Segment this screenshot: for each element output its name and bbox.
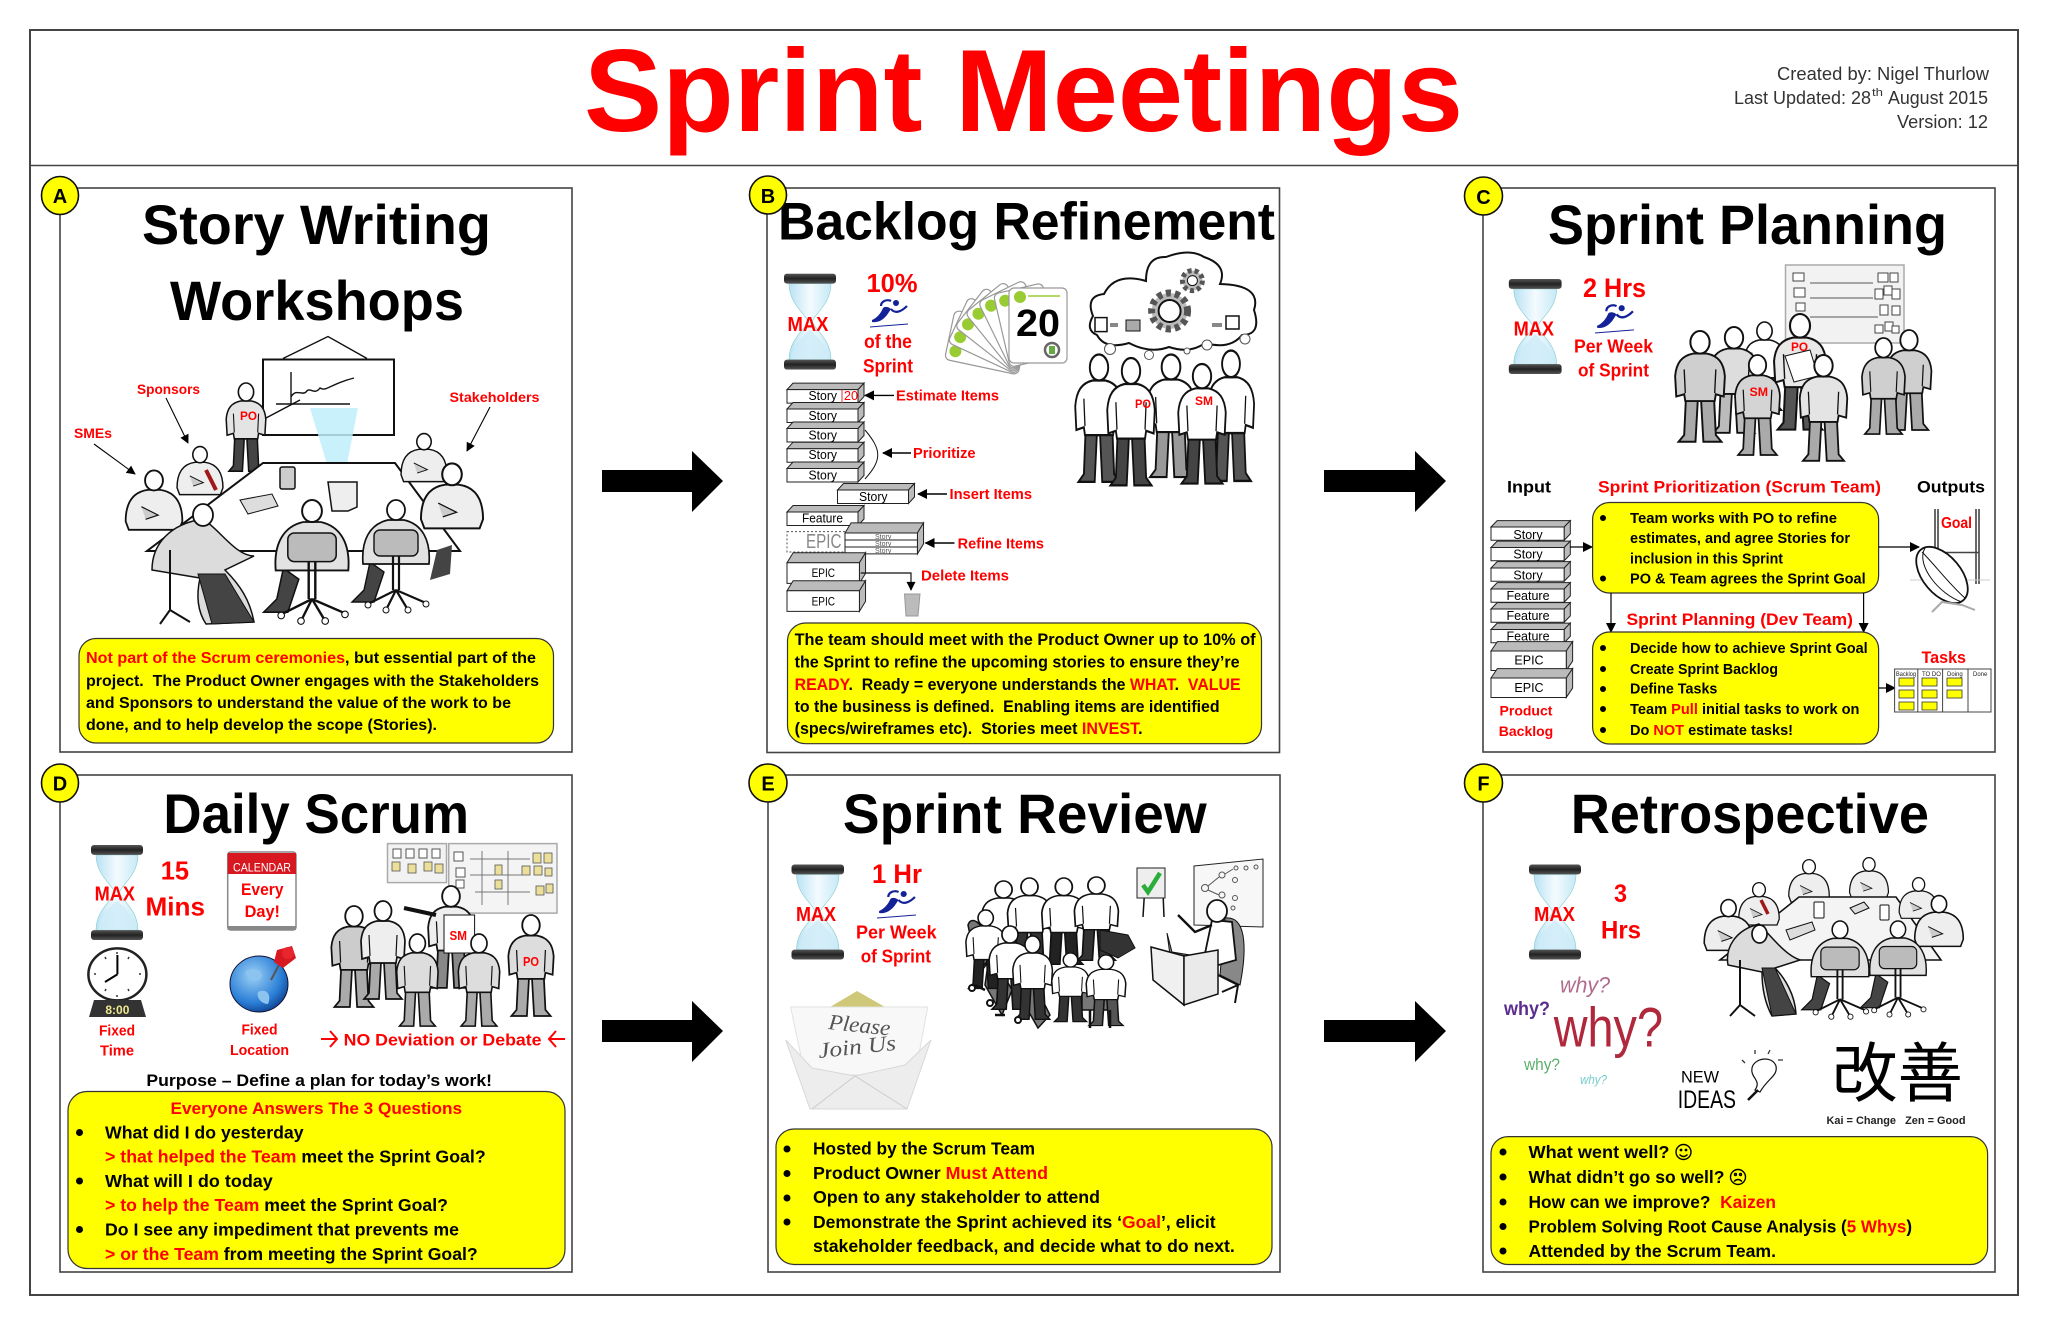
icon: planning poker cards: [945, 280, 1067, 375]
document credits: Created by: Nigel Thurlow: [1777, 64, 1990, 84]
backlog stack: EPIC: [812, 566, 835, 580]
text: purpose: Purpose – Define a plan for today’s work!: [146, 1071, 492, 1090]
label: Delete Items: Delete Items: [921, 569, 1009, 585]
label: Sponsors: Sponsors: [137, 381, 200, 397]
backlog stack: Story: [875, 541, 892, 548]
backlog stack: Story: [875, 534, 892, 541]
icon: calendar: Every: [241, 880, 284, 899]
arrow: A to B: [602, 451, 723, 512]
callout: the 3 questions: > or the Team from meeting the Sprint Goal?: [105, 1244, 478, 1264]
backlog stack: 20: [844, 389, 858, 403]
word cloud: why: why?: [1560, 972, 1611, 997]
label: SMEs: [74, 425, 135, 474]
time box: 2 Hrs per week of Sprint: Per Week: [1574, 337, 1654, 357]
label: Sponsors: [137, 381, 200, 443]
backlog stack: Feature: [802, 512, 843, 526]
badge F: [1464, 764, 1502, 802]
callout: Attended by the Scrum Team.: [1528, 1241, 1776, 1261]
arrow: to goal: [1878, 546, 1919, 548]
callout: Sprint Prioritization: PO & Team agrees the Sprint Goal: [1630, 572, 1866, 588]
label: Goal: Goal: [1941, 515, 1972, 532]
callout: done, and to help develop the scope (Stories).: [86, 717, 437, 734]
document credits: [1734, 64, 1990, 132]
badge C: C: [1476, 187, 1491, 209]
product backlog stack: Feature: [1506, 630, 1550, 644]
label: PO: PO: [1135, 397, 1151, 411]
product backlog stack: Story: [1513, 528, 1543, 542]
panel A: Story Writing Workshops: [42, 176, 572, 752]
product backlog stack: Story: [1513, 569, 1543, 583]
callout: [776, 1129, 1272, 1264]
badge E: [749, 764, 787, 802]
label: PO: PO: [240, 411, 257, 423]
callout: Sprint Planning: Create Sprint Backlog: [1630, 662, 1778, 678]
illustration: new ideas: IDEAS: [1678, 1086, 1736, 1114]
callout: [1491, 1137, 1988, 1264]
label: PO: PO: [1791, 340, 1808, 354]
icon: invitation envelope: [786, 991, 931, 1109]
word cloud: why: [1503, 972, 1663, 1087]
panel B: Backlog Refinement: [750, 176, 1280, 752]
label: Fixed Location: Fixed: [242, 1022, 278, 1039]
backlog stack: Story: [808, 468, 838, 482]
product backlog stack: Feature: [1506, 609, 1550, 623]
arrow: B to C: [1324, 451, 1446, 512]
label: Stakeholders: Stakeholders: [450, 389, 540, 405]
heading: Story Writing: [142, 193, 491, 256]
word cloud: why: why?: [1503, 999, 1550, 1020]
callout: to the business is defined. Enabling items are identified: [795, 698, 1220, 716]
document credits: August 2015: [1888, 88, 1988, 108]
arrow: right down: [1863, 593, 1865, 632]
label: Product Backlog: Backlog: [1499, 723, 1553, 739]
label: Kai = Change, Zen = Good: Kai = Change Zen = Good: [1826, 1115, 1966, 1127]
backlog stack: Story: [808, 389, 838, 403]
backlog stack: [787, 383, 924, 616]
badge A: A: [53, 186, 67, 208]
time box: 15 Mins: 15: [161, 856, 189, 886]
illustration: audience and presenter: [966, 859, 1263, 1028]
illustration: new ideas: [1678, 1050, 1786, 1114]
callout: What went well?: [1528, 1142, 1670, 1162]
callout: Not part of the Scrum ceremonies, but essential part of the: [86, 650, 536, 667]
label: Prioritize: Prioritize: [913, 446, 976, 462]
word cloud: why: why?: [1553, 996, 1663, 1058]
time box: 3 Hrs: 3: [1614, 880, 1627, 908]
callout: the Sprint to refine the upcoming stories to ensure they’re: [795, 653, 1240, 671]
callout: Sprint Planning: Team Pull initial tasks to work on: [1630, 702, 1860, 718]
icon: calendar: [228, 852, 296, 930]
icon: invitation envelope: Please: [826, 1009, 892, 1040]
time box: 10% of the Sprint: Sprint: [863, 356, 914, 378]
icon: invitation envelope: Join Us: [817, 1030, 897, 1063]
badge B: [750, 176, 786, 214]
callout: Sprint Prioritization: inclusion in this Sprint: [1630, 551, 1783, 567]
callout: Hosted by the Scrum Team: [813, 1139, 1035, 1159]
icon: clock: 8:00: [105, 1003, 130, 1017]
time box: 2 Hrs per week of Sprint: of Sprint: [1578, 361, 1649, 381]
label: Fixed Time: [99, 1023, 135, 1060]
document credits: Version: 12: [1897, 112, 1988, 132]
label: Fixed Location: Location: [230, 1042, 289, 1059]
badge F: F: [1477, 774, 1490, 796]
callout: Sprint Prioritization: Team works with PO to refine: [1630, 511, 1837, 527]
heading: Tasks: Tasks: [1922, 649, 1966, 667]
callout: the 3 questions: Do I see any impediment that prevents me: [105, 1220, 459, 1240]
heading: [142, 193, 491, 332]
icon: clock: [88, 948, 146, 1017]
arrow: backlog to prioritization: [1570, 546, 1592, 548]
product backlog stack: [1491, 521, 1573, 697]
callout: READY. Ready = everyone understands the WHAT. VALUE: [795, 676, 1241, 694]
callout: Problem Solving Root Cause Analysis (5 Whys): [1528, 1216, 1912, 1236]
callout: (specs/wireframes etc). Stories meet INVEST.: [795, 720, 1143, 738]
task board: Backlog: [1896, 672, 1916, 678]
label: Product Backlog: Product: [1500, 703, 1553, 719]
time box: 15 Mins: [146, 856, 205, 922]
callout: the 3 questions: What did I do yesterday: [105, 1122, 304, 1142]
time box: 3 Hrs: Hrs: [1601, 916, 1641, 944]
heading: Outputs: Outputs: [1917, 478, 1985, 497]
product backlog stack: EPIC: [1514, 654, 1544, 668]
product backlog stack: Story: [1513, 547, 1543, 561]
badge B: B: [761, 186, 775, 208]
time box: 2 Hrs per week of Sprint: 2 Hrs: [1583, 273, 1646, 303]
backlog stack: Story: [808, 428, 838, 442]
backlog stack: EPIC: [806, 531, 842, 553]
label: PO: PO: [523, 955, 539, 969]
callout: What didn’t go so well?: [1528, 1167, 1724, 1187]
label: SM: SM: [1750, 385, 1768, 399]
backlog stack: Story: [808, 409, 838, 423]
icon: hourglass: MAX: [1514, 318, 1555, 340]
icon: hourglass: [784, 274, 836, 370]
document credits: Last Updated: 28: [1734, 88, 1871, 108]
callout: Sprint Prioritization: [1593, 502, 1879, 593]
callout: Sprint Planning: [1593, 632, 1879, 744]
kanji: Kaizen: 改善: [1832, 1037, 1963, 1110]
label: Insert Items: Insert Items: [950, 487, 1032, 503]
time box: 1 Hr per week of Sprint: [856, 859, 938, 966]
label: Estimate Items: Estimate Items: [896, 388, 999, 404]
badge E: E: [761, 774, 775, 796]
label: Stakeholders: [450, 389, 540, 451]
word cloud: why: why?: [1580, 1072, 1608, 1087]
callout: and Sponsors to understand the value of the work to be: [86, 695, 511, 712]
time box: 2 Hrs per week of Sprint: [1574, 273, 1654, 381]
panel E: Sprint Review: [749, 764, 1280, 1272]
callout: project. The Product Owner engages with the Stakeholders: [86, 673, 539, 690]
icon: frown: [1730, 1170, 1746, 1184]
icon: hourglass: MAX: [788, 314, 829, 336]
arrow: E to F: [1324, 1001, 1446, 1062]
heading: Backlog Refinement: [778, 192, 1275, 252]
illustration: new ideas: NEW: [1681, 1068, 1719, 1086]
illustration: team standup at boards: [331, 844, 557, 1026]
label: SMEs: SMEs: [74, 425, 112, 441]
callout: The team should meet with the Product Owner up to 10% of: [795, 631, 1256, 649]
label: Fixed Time: Time: [100, 1042, 134, 1060]
callout: Sprint Planning: Define Tasks: [1630, 682, 1717, 698]
illustration: retrospective table: [1704, 858, 1963, 1019]
icon: hourglass: [792, 864, 844, 960]
task board: Done: [1973, 672, 1988, 678]
label: Product Backlog: [1499, 703, 1553, 739]
icon: hourglass: MAX: [1534, 904, 1576, 926]
arrow: to tasks: [1878, 687, 1895, 689]
product backlog stack: Feature: [1506, 589, 1550, 603]
label: SM: SM: [1195, 394, 1213, 408]
backlog stack: Story: [808, 448, 838, 462]
callout: the 3 questions: What will I do today: [105, 1171, 273, 1191]
callout: Sprint Prioritization: estimates, and agree Stories for: [1630, 531, 1850, 547]
heading: Daily Scrum: [163, 782, 469, 845]
callout: Sprint Planning: Do NOT estimate tasks!: [1630, 723, 1793, 739]
illustration: workshop around a table: [126, 336, 483, 624]
label: Refine Items: Refine Items: [958, 536, 1044, 552]
badge D: D: [53, 774, 67, 796]
heading: Sprint Prioritization: Sprint Prioritization (Scrum Team): [1598, 478, 1881, 497]
callout: the 3 questions: [68, 1092, 565, 1268]
icon: smile: [1676, 1144, 1691, 1160]
task board: [1895, 669, 1991, 712]
heading: Workshops: [170, 269, 464, 332]
arrow: left down: [1610, 593, 1612, 632]
icon: globe with pin: [230, 946, 296, 1012]
callout: Sprint Planning: Decide how to achieve Sprint Goal: [1630, 641, 1868, 657]
time box: 1 Hr per week of Sprint: Per Week: [856, 922, 938, 942]
heading: Sprint Planning: [1548, 193, 1947, 256]
icon: rugby goal and ball: [1906, 509, 1990, 612]
label: Fixed Time: Fixed: [99, 1023, 135, 1040]
callout: the 3 questions: > to help the Team meet the Sprint Goal?: [105, 1195, 448, 1215]
icon: trash can: [904, 594, 920, 616]
callout: Demonstrate the Sprint achieved its ‘Goal’, elicit: [813, 1212, 1216, 1232]
backlog stack: Story: [875, 548, 892, 555]
time box: 3 Hrs: [1601, 880, 1641, 944]
icon: calendar: Day!: [245, 902, 280, 921]
callout: Open to any stakeholder to attend: [813, 1187, 1100, 1207]
time box: 10% of the Sprint: of the: [864, 332, 912, 353]
time box: 10% of the Sprint: [863, 268, 918, 378]
panel D: Daily Scrum: [42, 764, 572, 1272]
backlog stack: Story: [859, 490, 888, 504]
callout: no deviation: NO Deviation or Debate: [344, 1031, 542, 1049]
badge A: [42, 176, 78, 214]
panel F: Retrospective: [1464, 764, 1995, 1272]
callout: the 3 questions: Everyone Answers The 3 Questions: [170, 1100, 462, 1118]
icon: calendar: CALENDAR: [233, 861, 291, 875]
time box: 15 Mins: Mins: [146, 892, 205, 922]
time box: 1 Hr per week of Sprint: 1 Hr: [872, 859, 922, 889]
word cloud: why: why?: [1523, 1055, 1560, 1074]
heading: Sprint Planning (Dev Team): Sprint Planning (Dev Team): [1626, 610, 1853, 629]
heading: Sprint Review: [843, 782, 1207, 845]
badge C: [1464, 177, 1502, 215]
icon: planning poker cards: 20: [1016, 303, 1060, 345]
panel C: Sprint Planning: [1464, 177, 1995, 752]
title: Sprint Meetings: [584, 25, 1463, 156]
icon: hourglass: MAX: [796, 904, 837, 926]
icon: hourglass: MAX: [95, 884, 136, 906]
product backlog stack: EPIC: [1514, 681, 1544, 695]
icon: hourglass: [91, 845, 143, 940]
illustration: team at a planning board: [1675, 265, 1931, 461]
callout: How can we improve? Kaizen: [1528, 1192, 1776, 1212]
arrow: D to E: [602, 1001, 723, 1062]
callout: the 3 questions: > that helped the Team meet the Sprint Goal?: [105, 1146, 486, 1166]
time box: 1 Hr per week of Sprint: of Sprint: [861, 946, 931, 966]
backlog stack: EPIC: [812, 594, 835, 608]
callout: [79, 638, 554, 743]
illustration: team thinking cloud: [1075, 252, 1256, 485]
task board: Doing: [1947, 672, 1963, 678]
icon: hourglass: [1509, 279, 1562, 374]
badge D: [42, 764, 78, 802]
heading: Input: Input: [1507, 478, 1551, 497]
label: Prioritize: [883, 446, 976, 462]
task board: TO DO: [1922, 672, 1941, 678]
document credits: th: [1872, 87, 1883, 99]
callout: [788, 623, 1262, 744]
time box: 10% of the Sprint: 10%: [866, 268, 918, 298]
icon: hourglass: [1529, 864, 1581, 960]
label: Fixed Location: [230, 1022, 289, 1059]
heading: Retrospective: [1571, 782, 1929, 845]
callout: stakeholder feedback, and decide what to do next.: [813, 1236, 1235, 1256]
callout: Product Owner Must Attend: [813, 1163, 1048, 1183]
label: SM: SM: [450, 929, 467, 943]
